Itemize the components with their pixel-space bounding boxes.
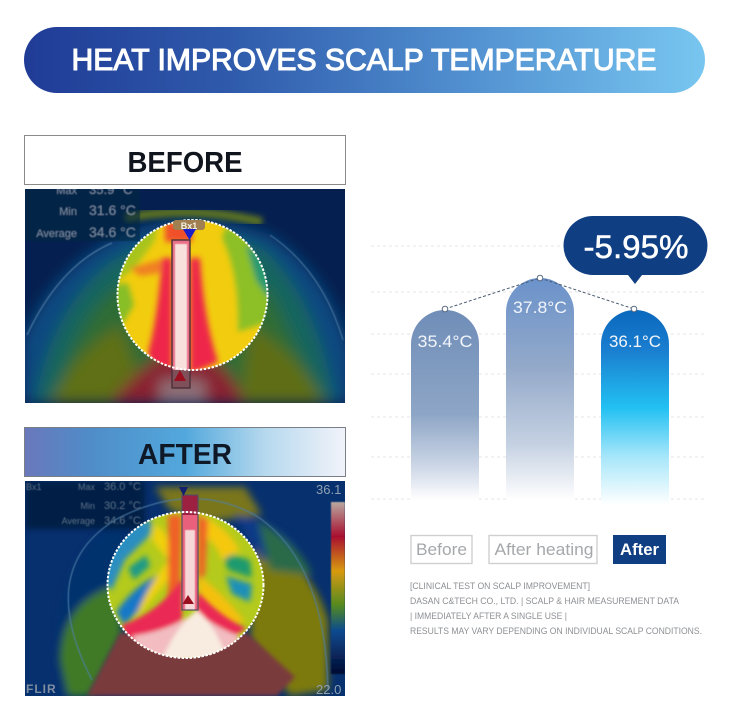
temperature readout: Bx1 (26, 482, 42, 492)
bar: after heating 37.8 (506, 278, 574, 500)
thermal image: before (22, 182, 350, 403)
temperature readout (25, 182, 140, 241)
legend: before (411, 536, 472, 564)
footnote (410, 581, 702, 636)
before heading: BEFORE (128, 147, 242, 179)
temperature readout: Min (80, 501, 95, 511)
legend: after heating (489, 536, 597, 564)
bar: before 35.4 (411, 310, 479, 500)
marker label: Bx1 (181, 221, 197, 231)
temperature readout (26, 481, 141, 527)
footnote: RESULTS MAY VARY DEPENDING ON INDIVIDUAL SCALP CONDITIONS. (410, 626, 702, 636)
before heading (24, 136, 346, 184)
temperature readout: Average (36, 228, 77, 240)
bar: after 36.1: 36.1°C (609, 332, 661, 351)
colour scale: 22.0 (316, 682, 341, 697)
title banner: HEAT IMPROVES SCALP TEMPERATURE (72, 42, 656, 77)
temperature readout: 34.6 °C (104, 515, 141, 527)
footnote: DASAN C&TECH CO., LTD. | SCALP & HAIR MEASUREMENT DATA (410, 596, 679, 606)
temperature readout: 31.6 °C (89, 202, 136, 218)
measurement strip (172, 240, 190, 388)
legend (411, 535, 666, 564)
legend: after heating: After heating (494, 540, 594, 559)
bar chart (371, 246, 704, 505)
temperature readout: Max (78, 482, 95, 492)
temperature readout: Average (62, 516, 95, 526)
bar: after 36.1 (601, 310, 669, 505)
temperature readout: 34.6 °C (89, 224, 136, 240)
after heading: AFTER (138, 439, 232, 471)
thermal image: after (25, 481, 345, 697)
legend: after: After (620, 540, 659, 559)
bar: after heating 37.8: 37.8°C (513, 298, 567, 317)
bar: before 35.4: 35.4°C (418, 332, 472, 351)
title banner (24, 27, 705, 93)
legend: before: Before (416, 540, 467, 559)
scalp heat circle (118, 221, 268, 370)
temperature readout: 36.0 °C (104, 481, 141, 493)
callout (564, 216, 708, 284)
FLIR logo: FLIR (26, 682, 57, 696)
after heading (24, 428, 346, 476)
temperature readout: Min (59, 206, 77, 218)
colour scale (316, 482, 345, 697)
temperature readout: 35.9 °C (89, 182, 133, 197)
footnote: | IMMEDIATELY AFTER A SINGLE USE | (410, 611, 567, 621)
measurement strip (179, 487, 198, 610)
temperature readout: Max (56, 185, 77, 197)
trend line (442, 275, 637, 312)
legend: after (613, 535, 666, 564)
colour scale: 36.1 (316, 482, 341, 497)
scalp heat ellipse (104, 510, 265, 660)
marker label (173, 220, 205, 240)
footnote: [CLINICAL TEST ON SCALP IMPROVEMENT] (410, 581, 590, 591)
callout: -5.95% (584, 229, 688, 265)
temperature readout: 30.2 °C (104, 500, 141, 512)
